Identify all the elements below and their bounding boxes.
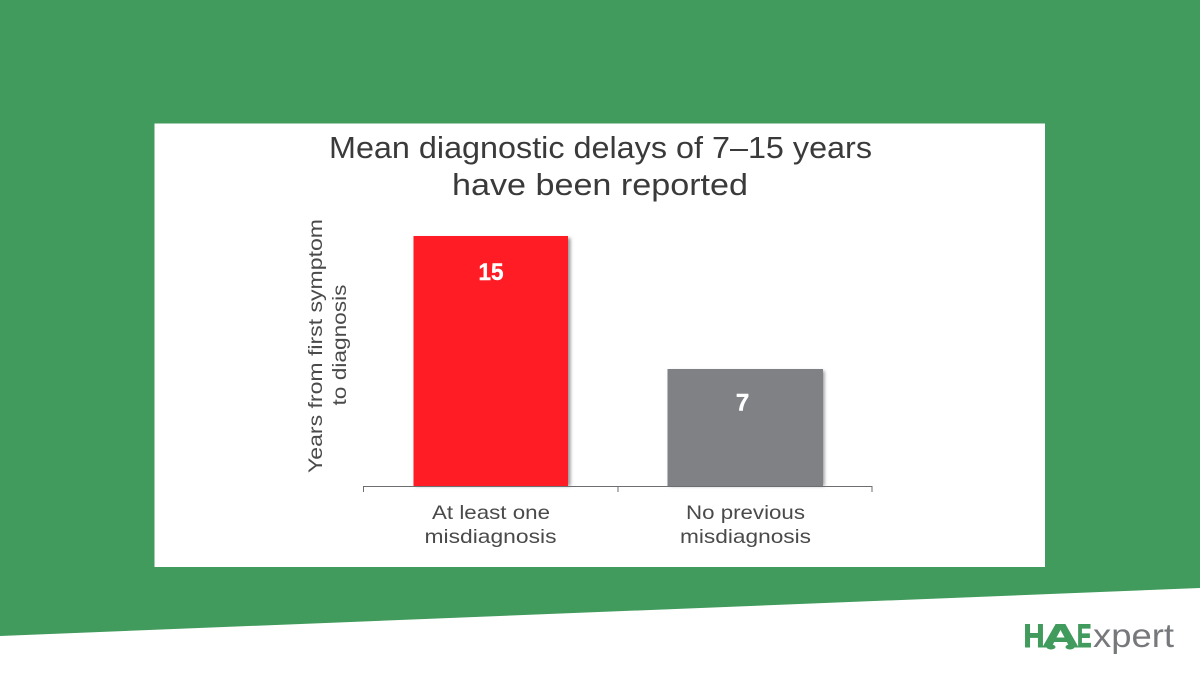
category label: no previous misdiagnosis: No previous (686, 502, 805, 524)
title: Mean diagnostic delays of 7–15 years (329, 130, 872, 165)
category label: no previous misdiagnosis (680, 502, 811, 548)
bar: no previous misdiagnosis, 7: 7 (736, 390, 749, 416)
title (329, 130, 872, 202)
category label: at least one misdiagnosis (424, 502, 557, 548)
y-axis label (305, 219, 351, 473)
bar: at least one misdiagnosis, 15: 15 (478, 259, 504, 286)
logo: HAExpert: xpert (1093, 617, 1174, 654)
category label: at least one misdiagnosis: At least one (432, 502, 550, 524)
category label: no previous misdiagnosis: misdiagnosis (680, 526, 811, 548)
y-axis label: Years from first symptom (305, 219, 327, 473)
logo: HAExpert (1024, 617, 1174, 654)
x axis (364, 486, 872, 492)
title: have been reported (452, 167, 748, 202)
category label: at least one misdiagnosis: misdiagnosis (424, 526, 557, 548)
y-axis label: to diagnosis (329, 284, 351, 406)
white angled footer band (0, 588, 1200, 675)
logo: HAExpert: A (1042, 618, 1079, 654)
logo: HAExpert: H (1024, 618, 1044, 654)
logo: HAExpert: E (1077, 618, 1092, 654)
bar: at least one misdiagnosis, 15 (414, 236, 570, 486)
white chart panel (154, 124, 1045, 567)
bar: no previous misdiagnosis, 7 (668, 369, 824, 486)
